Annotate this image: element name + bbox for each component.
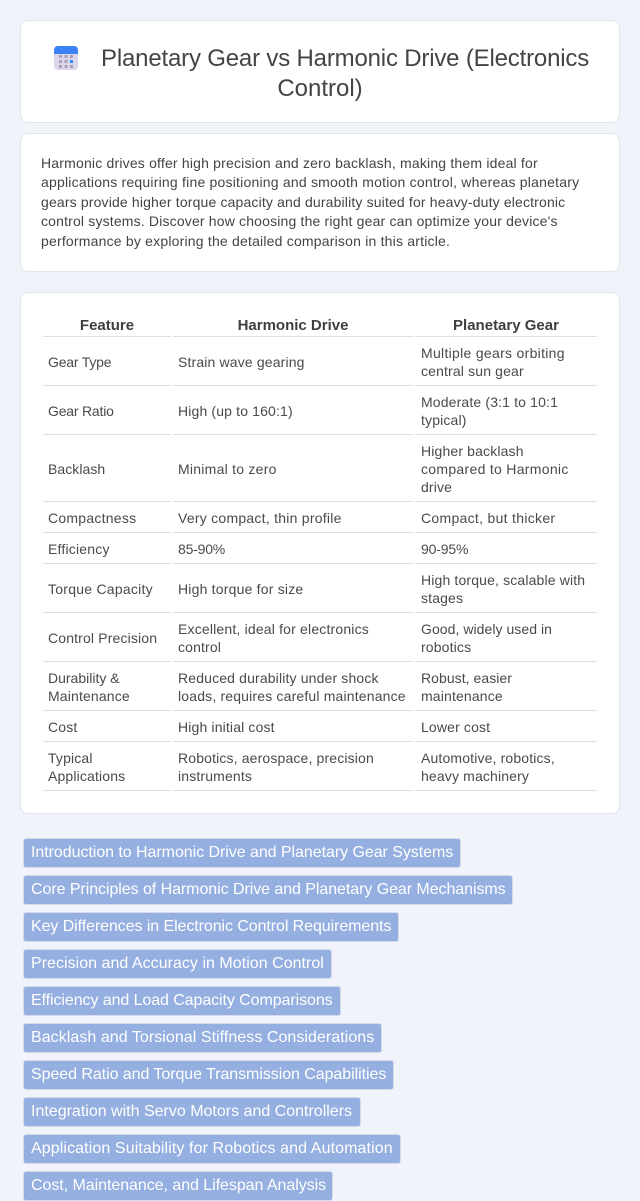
tag: precision [23, 949, 332, 979]
text block: introduction: applications requiring fine positioning and smooth motion control, whereas planetary [41, 174, 579, 190]
row: gear type: Strain wave gearing [178, 354, 305, 370]
table header row: Planetary Gear [453, 317, 559, 334]
row: durability and maintenance: loads, requires careful maintenance [178, 688, 406, 704]
tag: efficiency [23, 986, 341, 1016]
row: cost: Cost [48, 719, 77, 735]
row: compactness: Compactness [48, 510, 136, 526]
text block: introduction: control systems. Discover how choosing the right gear can optimize your device's [41, 213, 558, 229]
panel: introduction card [20, 133, 620, 272]
row: compactness: Very compact, thin profile [178, 510, 342, 526]
table header row: Feature [80, 317, 134, 334]
row: typical applications: heavy machinery [421, 768, 529, 784]
row: gear ratio [43, 394, 597, 435]
panel: comparison table card [20, 292, 620, 814]
table header row [43, 317, 597, 337]
row: gear ratio: High (up to 160:1) [178, 403, 293, 419]
tag: application [23, 1134, 401, 1164]
row: durability and maintenance: maintenance [421, 688, 503, 704]
row: compactness [43, 510, 597, 533]
row: durability and maintenance: Robust, easier [421, 670, 512, 686]
row: gear type: central sun gear [421, 363, 524, 379]
tag: efficiency: Efficiency and Load Capacity Comparisons [31, 992, 333, 1009]
row: gear ratio: Gear Ratio [48, 403, 114, 419]
row: backlash: compared to Harmonic [421, 461, 569, 477]
title: Planetary Gear vs Harmonic Drive (Electronics [101, 45, 589, 72]
row: typical applications: Typical [48, 750, 93, 766]
row: control precision: Good, widely used in [421, 621, 552, 637]
tag: backlash [23, 1023, 382, 1053]
tag: backlash: Backlash and Torsional Stiffness Considerations [31, 1029, 374, 1046]
row: cost: High initial cost [178, 719, 275, 735]
row: typical applications: Applications [48, 768, 125, 784]
row: torque capacity [43, 572, 597, 613]
text block: introduction: Harmonic drives offer high precision and zero backlash, making them ideal for [41, 155, 538, 171]
tag: electronic control [23, 912, 399, 942]
row: torque capacity: Torque Capacity [48, 581, 153, 597]
row: gear type [43, 345, 597, 386]
row: control precision: robotics [421, 639, 471, 655]
row: durability and maintenance: Maintenance [48, 688, 130, 704]
text block: introduction: gears provide higher torque capacity and durability suited for heavy-duty electronic [41, 194, 565, 210]
title [101, 45, 589, 102]
tag: cost [23, 1171, 333, 1201]
title: Control) [277, 75, 363, 102]
row: torque capacity: High torque, scalable with [421, 572, 585, 588]
row: typical applications: Robotics, aerospace, precision [178, 750, 374, 766]
text block: introduction: performance by exploring the detailed comparison in this article. [41, 233, 450, 249]
panel: title card [20, 20, 620, 123]
row: efficiency: 85-90% [178, 541, 225, 557]
row: gear ratio: Moderate (3:1 to 10:1 [421, 394, 558, 410]
tag: speed ratio [23, 1060, 394, 1090]
tag: core principles: Core Principles of Harmonic Drive and Planetary Gear Mechanisms [31, 881, 506, 898]
row: backlash [43, 443, 597, 502]
tag: application: Application Suitability for Robotics and Automation [31, 1140, 393, 1157]
row: efficiency [43, 541, 597, 564]
row: control precision: control [178, 639, 221, 655]
row: typical applications: Automotive, robotics, [421, 750, 555, 766]
row: typical applications: instruments [178, 768, 252, 784]
row: control precision: Control Precision [48, 630, 157, 646]
row: compactness: Compact, but thicker [421, 510, 555, 526]
tag: cost: Cost, Maintenance, and Lifespan Analysis [31, 1177, 326, 1194]
row: gear ratio: typical) [421, 412, 467, 428]
row: gear type: Gear Type [48, 354, 111, 370]
row: backlash: Backlash [48, 461, 105, 477]
row: durability and maintenance [43, 670, 597, 711]
tag: core principles [23, 875, 513, 905]
table header row: Harmonic Drive [238, 317, 348, 334]
row: torque capacity: High torque for size [178, 581, 303, 597]
tag: integration [23, 1097, 361, 1127]
row: control precision: Excellent, ideal for electronics [178, 621, 369, 637]
tag: electronic control: Key Differences in Electronic Control Requirements [31, 918, 391, 935]
row: backlash: drive [421, 479, 452, 495]
row: cost [43, 719, 597, 742]
row: backlash: Higher backlash [421, 443, 524, 459]
row: typical applications [43, 750, 597, 791]
tag: introduction [23, 838, 461, 868]
row: gear type: Multiple gears orbiting [421, 345, 565, 361]
icon: calendar [54, 46, 78, 70]
tag: speed ratio: Speed Ratio and Torque Transmission Capabilities [31, 1066, 386, 1083]
tag: introduction: Introduction to Harmonic Drive and Planetary Gear Systems [31, 844, 453, 861]
text block: introduction [41, 155, 580, 249]
tag: integration: Integration with Servo Motors and Controllers [31, 1103, 352, 1120]
tag: precision: Precision and Accuracy in Motion Control [31, 955, 324, 972]
row: durability and maintenance: Reduced durability under shock [178, 670, 379, 686]
row: backlash: Minimal to zero [178, 461, 277, 477]
row: control precision [43, 621, 597, 662]
row: efficiency: Efficiency [48, 541, 110, 557]
row: efficiency: 90-95% [421, 541, 468, 557]
row: durability and maintenance: Durability & [48, 670, 120, 686]
row: torque capacity: stages [421, 590, 463, 606]
table: comparison of features [43, 317, 597, 791]
row: cost: Lower cost [421, 719, 490, 735]
topic tags list [23, 838, 513, 1201]
